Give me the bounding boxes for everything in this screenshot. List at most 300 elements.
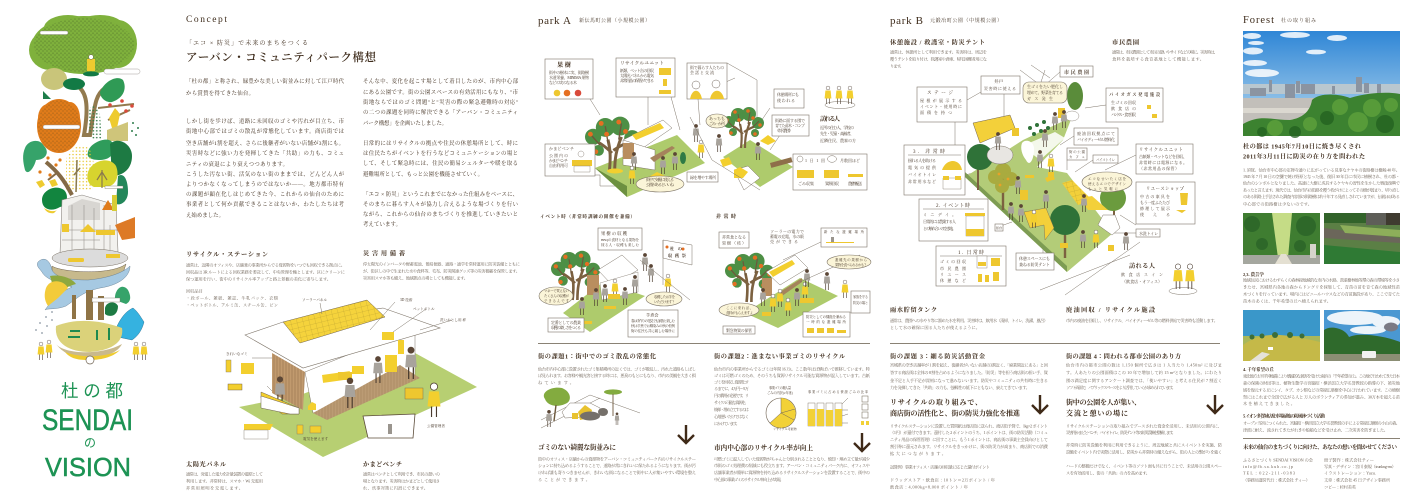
text block: issue 2: ゴミを回収し資源化す [714,378,749,386]
illustration: disaster scene: 防災としての機能を兼ねる [806,314,846,319]
text block: issue 1: ねています。 [538,380,574,386]
heading: goal 4 line 2: 交流と憩いの場に [1066,408,1128,418]
text block: concept left [186,77,345,219]
illustration: park B main: 市民農園 [940,265,966,271]
panel: forest [1243,15,1401,490]
text block: disaster stock: 停太陽光のインバータや軽蓄電池、簡易便器、通路・通学を常時運用に防災装備とともに [363,260,520,268]
text block: rain tank [890,317,1048,331]
callout: recycle unit [616,58,675,97]
logo: VISION: VISION [45,452,131,482]
illustration: park B main: エコなせいたく店を [1088,176,1126,181]
callout: small boxes: 育てた苗木・コンブ [775,122,805,128]
text block: goal 3: 割引券に還元されます。リサイクルをきっかけに、街の防災力が高まり、商店街での消費 [890,443,1049,450]
speech bubbles: あっちも [709,116,725,121]
text block: contact: ふるさとづくり SENDAI VISION の会 [1243,456,1314,464]
photo: farm rows [1324,213,1400,264]
illustration: park B main: バイコトイレ [1096,158,1116,162]
text block: goal 4: スを有効活用し、街の「共助」の力を高めます。 [1066,470,1150,476]
text block: forest item 4 [1243,366,1401,407]
text block: issue 2 [714,366,871,427]
illustration: park B main: バイオガス発電施設 [1109,91,1161,98]
illustration: park B main: 修理して展示 [1140,205,1171,211]
text block: solar panel: 通常は、発電した電力を計量装置の電源として [186,470,263,478]
text block: kamado bench: 場となります。災害時はかまどとして使用さ [363,478,440,484]
callout: bench: 公園内の [549,152,568,158]
ground right [723,140,793,187]
text block: goal 3: （1円）が還付できます。還付した 2 ポイントのうち、1 ポイントは、街の防災活動（コミュ [890,429,1048,436]
illustration: disaster scene: 一時的な避難場所 [806,319,846,324]
visitors: （飲食店・オフィス） [1122,278,1162,284]
text block: concept left: の課題が顕在化しはじめてきた今、これからの仙台のために [186,190,344,198]
text block: concept right: は住民たちがイベントを行うなどコミュニケーションの場と [363,149,518,157]
illustration: park B main: 市民農園 [1064,69,1089,76]
callout: fruit tree harvest: BBQの食材となる果物を [601,237,640,242]
visitors: 近所の住む人、学校の [820,124,854,130]
heading: issue 4: 街の課題 4：問われる都市公園のあり方 [1066,352,1181,360]
text block: credits: コピー：杉村美英 [1324,484,1357,490]
chart: pie: リサイクル可能物 [773,426,797,431]
arrow [1032,395,1048,413]
text block: goal 4: 災害用かまどとベンチ、バイオトイレ、防災テント等の防災設備を整備します。 [1066,429,1176,436]
callout: trucks: 月数回ほど [840,157,860,163]
back wall [305,328,415,413]
trees [967,82,1126,258]
heading: event: イベント時（非常時訓練の開催を兼備） [540,213,635,220]
callout: flag: 収穫祭 [668,252,687,259]
callouts: 屋根が展示する [920,97,962,103]
text block: issue 2: 仙台市内の事業所からでるゴミは年間 16 万t。ここ数年ほぼ横ばいで推移しています。特 [714,366,871,372]
photo: Sendai skyline [1243,31,1400,138]
text block: concept right: そのまちに暮らす人々が協力し合えるような場づくりを行い [363,200,518,208]
solar panel [283,300,385,343]
callout: bench: かまどベンチ [549,145,574,151]
panel: park A [538,15,871,483]
panel: park B [890,15,1223,490]
callouts: 売ができる [770,238,798,244]
speech bubbles [636,114,728,192]
callout: trucks: 1日1回 [805,157,825,163]
illustration: park B main: もっと気軽に [1088,186,1118,191]
illustration: park B main: 街の公園 [1069,149,1086,154]
text block: recycle station [186,262,345,308]
callout: recycle unit: リサイクルユニット [620,60,664,66]
section: issue 4 [1066,352,1223,476]
text block: goal 2: 市街のゴミ処理費の削減にも役立ちます。アーバン・コミュニティパーク内に、オフィスや [714,462,870,469]
text block: forest: 1. 須賀。仙台市中心部の定禅寺通りに広がっている見事なケヤキの街路樹は樹齢 40 年。 [1243,166,1400,174]
photo: green hill [1243,310,1320,361]
illustration: recycle station house: ペットボトル [413,306,435,311]
text block: concept left: こうした汚ない街、活気のない街のままでは、どんどん人が [186,170,345,178]
deck [313,365,420,420]
text block: kamado bench: れ、炊事対策に円滑にできます。 [363,484,428,492]
heading: goal 2: 市内中心部のリサイクル率が向上 [714,443,813,452]
text block: farm: 食料を栽培する食育基地として機能します。 [1112,56,1204,62]
text block: issue 4: 仙台市内の都市公園の数は 1,150 個所で広さは 1 人当たり 1,450m² に及びま [1066,362,1222,368]
heading: call to action: 未来の仙台のまちづくりに向けた、あなたの想いを聞かせてください [1243,443,1397,451]
illustration: park B main: 休憩など [940,277,966,283]
illustration: recycle station house: きれいなゴミ [226,351,248,356]
speech bubbles: 緑を増やす場所 [690,174,716,180]
illustration: park B main: カフェ [1069,154,1085,159]
text block: contact [1243,456,1314,484]
text block: rest facility [890,48,987,70]
heading: recycle station: リサイクル・ステーション [186,252,268,258]
text block: issue 3: 力を発揮してきた「共助」の力も、強靱性の低下にともない、衰えてきています。 [890,384,1030,391]
text block: concept left: 空き店舗が1割を超え、さらに後継者がいない店舗が3割にも。 [186,139,344,147]
illustration: recycle station house [226,297,477,457]
illustration: park B main: 中古の家具を [1140,193,1170,199]
heading: kamado bench: かまどベンチ [363,460,402,468]
callouts [719,228,867,248]
text block: issue 3: 金不足と人手不足が深刻になって進みないいます。防災やコミュニティの共有時に生きる [890,377,1048,384]
chart: pie [766,385,797,431]
text block: issue 2: 円の費用が必要です。リ [714,392,749,399]
text block: rest facility: 覆うテントを取り付け、救護室や倉庫、帰宅困難者用にな [890,56,987,62]
text block: solar panel [186,470,263,492]
illustration: park B main: 日常的には農業する人 [923,218,956,224]
text block: goal 2: 店舗事業者が簡単に資源物を持ち込めるリサイクルステーションを設置することで、街中の [714,469,870,476]
callouts: 面積を持つ [920,109,952,115]
callout: 果樹: などの実のなる木 [549,79,577,85]
illustration: park B main: 1. 日常時 [958,249,984,256]
illustration: park B main: 飲食店の [1111,105,1136,111]
text block: concept right [363,77,519,228]
text block: rest facility: 通常は、休憩所として利用できます。災害時は、周辺を [890,48,987,56]
text block: rain tank: として水の確保に困る人たちが使えるように。 [890,324,980,331]
text block: farm: 通常は、市民農園として市民の憩いやサイドなどの場に。災害時は、 [1112,48,1218,56]
illustration: disaster scene: 果物を食べられるかも？ [835,262,867,267]
callouts: 蓄電の充電、水の販 [770,233,804,239]
illustration: park B main: 非常用水など [908,178,936,184]
illustration: park B main: もう一度ふたたび [1140,199,1170,205]
text block: forest item 4: 祭にはこれまで全国で広がる人と 万人のボランティアの参加が進み、30万本を超える苗 [1243,394,1400,400]
cutaway outlet [363,414,415,438]
text block: rain tank: 通常は、農園への水やり等に溜めた水を利用。災害時は、飲用水（清掃、トイレ、洗濯、風呂） [890,317,1048,324]
text block: goal 2: 中心部の事業ゴミのリサイクル率向上が実現。 [714,476,784,483]
illustration: street litter [541,388,640,428]
text block: disaster stock [363,260,520,282]
callout: trucks: 農産物配送 [848,180,862,186]
panel: cover illustration and logo [23,15,147,482]
text block: concept right: 街地ならではのゴミ問題"と"災害の際の緊急避難時の対応" [363,98,518,106]
text block: issue 2: 心地悪いだけではなく [714,413,749,420]
illustration: disaster scene [719,228,871,337]
crops [1028,120,1050,136]
text block: goal 3: 試算例）事業オフィス・店舗の回収量に応じた還付ポイント [890,464,990,470]
station [623,120,672,150]
logo: 杜の都: 杜の都 [61,381,123,401]
illustration: tree tower city [23,15,147,364]
roof [245,308,440,368]
text block: recycle station: ・ペットボトル、アルミ缶、スチール缶、ビン [186,302,278,308]
people [995,110,1129,250]
text block: goal 1: ければ誰も寄りつきませんが、きれいな街になることで街中に人が集いやすい環境を整え [538,469,696,476]
callout: recycle unit: 紙類、ベット缶の回収 [620,67,654,73]
text block: forest item 2 [1243,271,1400,304]
text block: forest: のある街路上手法された調査内容部の街路樹は約十年する見直しされていますが、伝統ほぼある [1243,193,1400,200]
callouts: 果樹（枝） [722,240,746,246]
chart: pie: 事業ゴミの搬入量 [769,385,792,390]
illustration: park B main [904,65,1197,295]
callouts: 新たな避難場所 [824,229,865,234]
heading: goal 3 line 2: 商店街の活性化と、街の防災力強化を推進 [890,408,1020,418]
heading: goal 4: 街中の公園を人が集い、 [1066,398,1141,406]
text block: goal 3: ニティ用品の保管管理）に回すことに。もう 1 ポイントは、商店街の事業主会員向けとして [890,436,1048,443]
logo: SENDAI: SENDAI [42,404,133,437]
callout: 果樹: 果 樹 [557,61,572,69]
callouts: イベント・使用時に [920,103,962,109]
subheading: park A: 新伝馬町公園（小規模公園） [579,17,650,24]
apple tree [723,107,764,148]
callout: bench: 自由利用可 [549,162,568,168]
chart: pie: ごみの内訳(t/年度) [767,390,793,395]
text block: goal 4: リサイクルステーションの取り組みでブースされた資金を活用し、未活用の公園内に、 [1066,422,1222,430]
text block: credits: 冊子製作：株式会社ティー [1324,456,1374,464]
text block: forest item 2: 2,3. 農芸学 [1243,271,1264,278]
illustration: park B main: 揺れる人を助ける [908,157,936,163]
chart: bars: 事業ゴミに占める資源ごみの比率 [808,389,869,394]
heading: rain tank: 雨水貯留タンク [890,306,937,314]
text block: concept left: 「杜の都」と称され、緑豊かな美しい街並みに対して江戸時代 [186,77,345,85]
speech bubbles: ごみ一か所 [709,120,725,126]
logo: の: の [84,436,96,450]
illustration: park B main: 埋めて、野菜を育てる [1027,89,1063,95]
text block: forest item 2: 地域住民におけるわずらくの森林緑地域的な市内の水路、貴重樹林地等環の森の環境等を小さ [1243,276,1400,284]
callout: flag: 杜の [670,245,682,252]
text block: contact: （事務局運営代行：株式会社 ティー） [1243,476,1310,484]
callout: small boxes: 街路に面する園で [775,117,805,123]
text block: disaster stock: 災害用スマホ等も備え、地域拠点の場としても機能します。 [363,274,468,282]
text block: forest: あったと言えます。現代では、仙台市内の街路を覆う枝がけによってその樹が弱まり、切り直し [1243,186,1400,194]
text block: concept left: え始めました。 [186,211,224,219]
text block: kamado bench [363,470,440,492]
divider [538,342,870,344]
text block: forest item 5: 5. イオン多賀城店駐車場緑地の防風林づくり活動 [1243,412,1326,420]
arrow [678,425,694,443]
title: アーバン・コミュニティパーク構想 [186,50,376,64]
divider [890,342,1220,344]
text block: goal 3: 拡大につながります。 [890,450,946,457]
callout: flag [663,240,692,285]
illustration: park B main: 古紙類・ペットなどを回収、 [1139,153,1187,159]
callout: fruit tree harvest: 果樹の収穫 [601,230,628,237]
text block: forest item 2: きたせ、宮城県内各地の森からドングリを採集して、育苗の苗を育て森の地域性苗 [1243,284,1400,290]
text block: concept left: よりつかなくなってしまうのではないか——。地方都市特有 [186,180,345,188]
callout: people talk [687,63,727,99]
text block: concept right: 「エコ × 防災」というこれまでになかった仕組みをベースに、 [363,190,518,198]
arrow [1207,395,1223,413]
text block: concept left: 事業者として何か貢献できることはないか、わたしたちは考 [186,200,345,208]
illustration: disaster scene: 家族を守る [853,294,868,299]
illustration: park B main: バイオトイレ [908,171,936,177]
text block: issue 2: るまでに、4 万円〜5 万 [714,385,749,392]
text block: issue 3: 宮城県の空き店舗率が 1 割を超え、後継者がいない店舗の3割近く、「廃業間近にある」と回 [890,362,1048,368]
tree [585,117,640,172]
illustration: park B main: 生ゴミをたい肥化し [1027,83,1063,89]
ground left [595,135,705,197]
text block: issue 4: 園の満足度に関するアンケート調査では、「使いやすい」と考える住民が 7 割近く [1066,377,1222,384]
divider [1243,438,1400,440]
callout: recycle unit: 非常用品の保管ができる [620,77,654,83]
text block: issue 3 [890,362,1049,391]
items [226,360,231,372]
text block: recycle station: ・段ボール、雑紙、雑誌、牛乳パック、衣類 [186,294,279,302]
callout: 果樹: 水道栄養、MINIMA 果物 [549,74,589,80]
visitors: 先生・児童・高齢者、 [820,130,854,136]
photo: trees and van [1324,310,1400,361]
speech bubbles [539,287,682,306]
illustration: park B main: 井戸 [994,78,1004,85]
speech bubbles: いただけます？ [654,299,675,304]
text block: issue 2: サイクル可能な資源を、 [714,399,749,406]
text block: goal 1 [538,456,697,483]
callout: people talk: 会話と交流 [690,69,714,75]
tent [973,115,1015,143]
illustration: park B main: 使える [1140,211,1170,217]
text block: contact: info@fb.sa.kuh.co.jp [1243,464,1293,469]
illustration: park B main: 兼ねる防災テント [1019,261,1050,267]
text block: kamado bench: 通常はベンチとして利用でき、市民の憩いの [363,470,440,478]
people [345,378,355,408]
callout: experiences: 芋煮会 [646,312,659,318]
arrow [854,433,870,451]
visitors [820,86,856,143]
illustration: recycle station house: 洗いおとし用 秤 [440,317,466,322]
truck [734,166,760,190]
heading: oil recycling: 廃油回収 / リサイクル施設 [1066,306,1156,314]
illustration: disaster scene: 緊急物資の保管 [726,327,752,333]
illustration: park B main: （非常用品の保管） [1139,165,1179,171]
text block: forest item 4: 4. 千年希望の丘 [1243,366,1274,373]
stalls [1024,208,1054,240]
callout: experiences: 秋は芋煮でお馴染みの秋の恒例 [631,323,676,328]
text block: credits: 写真・デザイン：宮川 泰規（trunkng-rm） [1324,463,1396,470]
illustration: park B main: 屋台 [996,225,1003,230]
heading: park B: park B [890,15,923,27]
green parcel [965,117,1113,272]
illustration: park B main: 休憩スペースにも [1019,255,1050,261]
text block: recycle station: 通常は、近隣のオフィスや、店舗兼の事業所からでる資源物をいつでも回収できる拠点に。 [186,262,345,268]
visitors: 飲食店スイン [1121,271,1163,277]
text block: concept right: して、そして緊急時には、住民の簡易シェルターや暖を取る [363,159,518,167]
text block: forest item 4: 森の保険の財団等は、植物生態学の宮脇昭・横浜国立大学名誉教授の指導の下、被災地 [1243,380,1401,386]
callout: 果樹 [545,59,593,99]
text block: credits: 文章：株式会社 45 日デザイン事務所 [1324,476,1391,484]
callout: small boxes: 休憩場所にも [777,91,799,97]
subheading: 「エコ × 防災」で未来のまちをつくる [186,39,308,47]
text block: forest item 2: 苗木のあくは、千年希望の丘へ植えられます。 [1243,298,1331,304]
heading: goal 1: ゴミのない綺麗な街並みに [538,442,616,452]
text block: concept left: から賞賛を得てきた仙台。 [186,89,254,97]
speech bubbles: 街中で気軽に使える [646,176,674,182]
heading: Concept: Concept [186,15,227,25]
illustration: park B main: リユース [940,272,966,277]
callout: small boxes: 使われる [777,97,795,103]
subheading: forest: 杜の取り組み [1281,17,1316,24]
text block: forest item 5: オープン当初につくられた、宮脇昭・横浜国立大学名誉教授の手による常緑広葉樹の小山の森。 [1243,420,1400,426]
text block: disaster stock: が、街区しの中で生まれた水や食料等、毛布、防災関連グッズ等の災害備蓄を保管します。 [363,268,520,274]
text block: goal 3: ドラッグストア・飲食店：10トン＝2万ポイント / 年 [890,476,995,484]
callout: fruit tree harvest: 採る人・収穫も楽しむ [601,242,640,247]
callout: 果樹: 街中の樹木に実、街路樹 [549,69,589,75]
heading: issue 2: 街の課題2：進まない事業ゴミのリサイクル [714,352,846,360]
text block: issue 1: ば見られます。お客様や観光客と接する時には、悪臭のもとにもなり、市内の美観を大きく損 [538,372,697,379]
illustration: park B main: 3. 非常時 [913,148,945,155]
illustration: park B main: 電気の提供 [908,164,937,170]
leader labels [252,302,452,391]
text block: forest: 1945 年 7 月 10 日の空襲で焼け野原となった後、復旧 30 年目に市民に植樹され、杜の都・ [1243,173,1400,180]
illustration: park B main: ゴミの回収 [940,258,966,264]
illustration: park B main: ミニデイ。 [923,211,956,217]
text block: forest item 2: 木づくりを行っています。場内にはビニールハウスなどの育苗施設があり、ここで育てた [1243,290,1400,298]
text block: concept right: にある公園です。街の公園スペースの有効活用にもなり、"市 [363,88,519,96]
callout: trucks [793,154,867,190]
callout: recycle unit: 太陽光パネルから電気 [620,72,654,78]
text block: goal 1: ションに持ち込めるようすることで、道路が常にきれいに保たれるようになります。街が汚 [538,462,697,469]
callout: experiences: 収穫の楽しさをつくる [551,324,581,330]
illustration: park A main [545,58,867,197]
heading: issue 1: 街の課題1：街中でのゴミ散乱の常態化 [538,352,656,360]
speech bubbles: 公園があるといいね [646,181,674,187]
text block: forest: 中心部での街路樹は少ないのです。 [1243,200,1312,208]
illustration: park B main: 生ゴミの回収 [1111,99,1136,105]
illustration: disaster scene: ここに来れば、 [726,305,753,310]
illustration: event scene [539,228,692,337]
heading: forest: 杜の都は 1945年7月10日に焼き尽くされ [1243,142,1362,150]
heading: solar panel: 太陽光パネル [186,460,227,468]
text block: goal 1: 街中のオフィス・店舗からの資源物をアーバン・コミュニティパーク内のリサイクルステー [538,456,696,462]
text block: recycle station: 保つ運用を行い、街中のリサイクル率アップと路上景観の美化に寄与します。 [186,276,331,282]
visitors: 近隣住民、農家の方 [820,137,856,143]
text block: issue 1 [538,366,697,386]
text block: goal 4: 設備をイベント内で実際に活用し、防災から非常時の備えながら、街の人との繋がりを強く [1066,448,1222,456]
text block: issue 1: 仙台市内中心部に設置されたゴミ集積場所の近くでは、ゴミが散乱し、汚れた道路もしばし [538,366,696,372]
speech bubbles: 収穫したお芋を [654,294,675,299]
illustration: park B main: リユースショップ [1146,186,1185,192]
text block: farm [1112,48,1218,62]
illustration: park B main: ハンドル・食で回収 [1111,111,1136,117]
text block: goal 4: 非常時に防災設備を利用に利用できるように、周辺地域と共にスイベントを実施、防 [1066,442,1223,448]
callout: fruit tree harvest [598,228,642,250]
callout: trucks: 資源回収 [825,180,839,186]
callouts: ステージ [927,90,953,96]
callout: experiences: 春は手作りの花見でも家族と楽しむ [631,318,676,323]
text block: goal 3 [890,422,1049,490]
callout: bench [545,144,595,176]
callouts: 非常食となる [722,234,746,240]
text block: concept right: の二つの課題を同時に解決できる「アーバン・コミュニティ [363,108,518,116]
callout: experiences: 定番としての農業 [551,319,581,325]
text block: credits [1324,456,1396,490]
text block: concept left: しかし街を歩けば、道路に未回収のゴミや汚れが目立ち、市 [186,117,345,125]
text block: forest item 5 [1243,412,1400,434]
text block: goal 3: リサイクルステーションに設置した質問紙は商店街に送られ、商店街予算で、1kg=2 ポイント [890,422,1048,430]
text block: concept right: そんな中、変化を起こす場として着目したのが、市内中心部 [363,77,519,85]
callout: people talk: 街で暮らす人たちの [690,64,724,70]
illustration: recycle station house: 公園管理者 [427,423,445,428]
text block: forest item 4: 域を復元する丘にシイ、タブ、カシ類などの常緑広葉樹を中心に行われています。この植樹 [1243,386,1401,394]
text block: solar panel: 利用します。非常時は、スマホ・Wi 充電用 [186,478,263,484]
text block: concept left: ニティの衰退により衰えつつあります。 [186,160,288,168]
speech bubbles: たくさんの収穫が [544,293,570,298]
illustration: park B main: 2. イベント時 [936,202,970,209]
callout: small boxes [772,89,809,136]
text block: oil recycling: 市内の廃油を回収し、リサイクル、バイオディーゼル等の燃料供給で災害時も活動します。 [1066,317,1218,324]
crates and cart [338,372,352,380]
text block: concept right: 避難場所として、もっと公園を機能させていく。 [363,170,483,178]
callout: trucks: ごみ収集 [798,180,814,186]
callout: experiences [548,310,678,337]
